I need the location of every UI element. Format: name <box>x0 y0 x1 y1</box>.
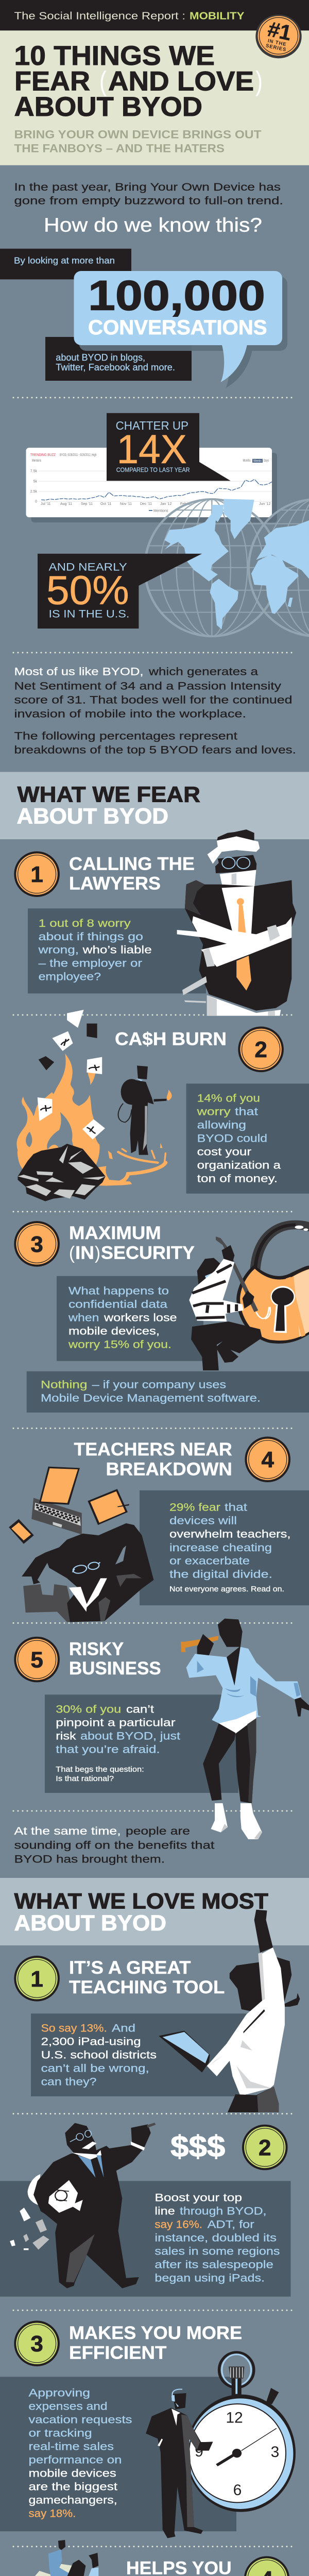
fact box: allowing <box>197 1120 246 1131</box>
fact box: confidential data <box>68 1298 167 1310</box>
heading: $$$ <box>170 2130 225 2163</box>
fact box <box>140 1490 309 1605</box>
love 2: dollars <box>0 2125 290 2297</box>
fact box: 1 out of 8 worry <box>39 918 131 929</box>
fact box: workers lose <box>104 1312 177 1324</box>
chart card: trending buzz: Months <box>243 459 251 463</box>
question heading: How do we know this? <box>44 214 262 236</box>
chart card: trending buzz: Mentions <box>153 509 168 513</box>
intro text: In the past year, Bring Your Own Device has <box>14 181 281 193</box>
fact text: say 16%. <box>154 2219 202 2231</box>
clock numbers <box>195 2410 279 2499</box>
50% in the U.S. callout: 50% <box>46 568 129 613</box>
fact box: mobile devices <box>29 2468 116 2480</box>
fact text: through BYOD, <box>180 2206 266 2217</box>
number coin 4 <box>244 2556 289 2576</box>
icon: jumping woman with ribbon <box>0 2540 114 2576</box>
chatter up callout: COMPARED TO LAST YEAR <box>116 467 190 473</box>
fact box: when <box>68 1312 99 1324</box>
fact box: mobile devices, <box>68 1325 160 1337</box>
transition text <box>14 1825 215 1866</box>
icon: frazzled teacher <box>22 1523 153 1622</box>
fact box: can’t all be wrong, <box>41 2063 149 2075</box>
section heading: what we fear <box>0 772 309 839</box>
chatter up callout <box>107 413 231 481</box>
heading: CA$H BURN <box>115 1029 227 1049</box>
fact box: cost your <box>197 1146 251 1158</box>
icon: stopwatch and man <box>146 2352 296 2538</box>
heading: TEACHING TOOL <box>69 1977 225 1997</box>
icon: flying devices <box>9 1467 129 1544</box>
fact box: are the biggest <box>29 2481 117 2493</box>
label: about BYOD in blogs: about BYOD in blogs, <box>56 352 145 363</box>
burning bills <box>38 1010 105 1140</box>
fact box: 29% fear <box>169 1502 220 1514</box>
number coin 4 <box>245 1436 290 1482</box>
50% in the U.S. callout: AND NEARLY <box>48 561 127 573</box>
chatter up callout: 14X <box>117 427 187 472</box>
clock numbers: 12 <box>226 2410 243 2427</box>
heading <box>69 854 195 894</box>
fact box: say 18%. <box>29 2508 76 2520</box>
transition text: BYOD has brought them. <box>14 1854 165 1866</box>
fear 3: maximum insecurity <box>14 1221 309 1413</box>
sentiment text block: invasion of mobile into the workplace. <box>14 708 246 720</box>
main title: FEAR <box>14 66 90 97</box>
fact box: gamechangers, <box>29 2495 117 2506</box>
badge: #1 in the series: #1 <box>266 17 294 45</box>
fact box: ton of money. <box>197 1173 278 1185</box>
sentiment text block: Net Sentiment of 34 and a Passion Intensity <box>14 680 282 692</box>
fact box: organization a <box>197 1160 281 1172</box>
speech bubble: 100,000 conversations: 100,000 <box>88 273 265 319</box>
solution box <box>27 1371 309 1413</box>
fact box: That begs the question: <box>56 1766 144 1774</box>
section heading: what we fear: ABOUT BYOD <box>16 804 168 828</box>
heading <box>69 2323 242 2363</box>
number coin 4: 4 <box>261 1447 274 1472</box>
number coin 1 <box>14 851 60 897</box>
clock numbers: 3 <box>271 2444 279 2461</box>
heading: IT’S A GREAT <box>69 1958 191 1978</box>
heading: MAKES YOU MORE <box>69 2323 242 2343</box>
number coin 2 <box>242 2125 288 2170</box>
heading: ) <box>95 1243 100 1263</box>
fact box: And <box>112 2022 135 2034</box>
main title: ABOUT BYOD <box>14 92 202 122</box>
fact box: that <box>235 1106 258 1117</box>
fact box: can they? <box>41 2076 97 2088</box>
box <box>0 2181 290 2297</box>
heading <box>69 1958 225 1997</box>
chart card: trending buzz: 0 <box>35 500 37 504</box>
fact box: real-time sales <box>29 2441 114 2453</box>
fact box: can’t <box>126 1703 154 1715</box>
section heading: what we fear: WHAT WE FEAR <box>18 783 200 807</box>
label: about BYOD in blogs: Twitter, Facebook and more. <box>56 362 175 372</box>
fact box <box>45 1694 238 1793</box>
fact box: that <box>225 1502 247 1514</box>
chart card: trending buzz: Dec '11 <box>140 502 152 506</box>
flamethrower man <box>118 1065 166 1155</box>
chart card: trending buzz: Mentions <box>32 459 41 463</box>
fact box: or tracking <box>29 2428 92 2439</box>
badge: #1 in the series: SERIES <box>265 43 287 53</box>
fact box: BYOD could <box>197 1133 267 1145</box>
fact box: worry 15% of you. <box>68 1338 171 1350</box>
title panel <box>0 30 309 165</box>
solution box: Nothing <box>41 1379 88 1391</box>
fear 2: cash burn <box>115 1026 309 1194</box>
fact box: wrong, <box>38 944 79 956</box>
heading <box>69 1223 195 1263</box>
icon: burning money and flamethrower man <box>16 1010 172 1201</box>
number coin 2 <box>238 1026 284 1072</box>
main title: ( <box>99 66 107 97</box>
main title: ) <box>255 66 263 97</box>
fact text: sales in some regions <box>154 2246 280 2258</box>
badge: #1 in the series: IN THE <box>267 38 287 47</box>
label: about BYOD in blogs <box>45 337 192 381</box>
number coin 2: 2 <box>254 1037 267 1062</box>
fact box: increase cheating <box>169 1542 272 1554</box>
heading: RISKY <box>69 1639 124 1659</box>
chart card: trending buzz: 5k <box>33 480 37 483</box>
fact box: overwhelm teachers, <box>169 1529 290 1540</box>
fact box: devices will <box>169 1515 237 1527</box>
icon: teacher with tablet <box>159 1910 300 2112</box>
intro text: gone from empty buzzword to full-on trend. <box>14 195 283 207</box>
fact box: Not everyone agrees. Read on. <box>169 1585 284 1594</box>
fact box: worry <box>196 1106 231 1117</box>
number coin 3 <box>14 1221 60 1267</box>
padlock <box>236 1225 309 1344</box>
fact box: U.S. school districts <box>41 2049 157 2061</box>
heading: MAXIMUM <box>69 1223 161 1243</box>
transition text: At the same time, <box>14 1825 121 1837</box>
fact text: ADT, for <box>208 2219 254 2231</box>
chart card: trending buzz: Sep '11 <box>81 502 93 506</box>
chart card: trending buzz: Jul '11 <box>41 502 51 506</box>
speech bubble: 100,000 conversations: CONVERSATIONS <box>88 316 267 339</box>
number coin 2: 2 <box>259 2135 271 2161</box>
heading: ( <box>69 1243 75 1263</box>
fact box <box>57 1276 203 1361</box>
fact box: risk <box>56 1731 76 1742</box>
chart card: trending buzz: Jan '12 <box>160 502 171 506</box>
header bar <box>0 0 309 30</box>
fact box <box>28 908 206 993</box>
thief <box>189 1236 262 1370</box>
heading: EFFICIENT <box>69 2343 166 2363</box>
sentiment text block: Most of us like BYOD, <box>14 666 143 678</box>
fact box <box>0 2377 236 2531</box>
fear 5: risky business <box>14 1637 238 1793</box>
chart card: trending buzz: BYOD, 6/26/2011 - 6/26/2012, High <box>60 453 97 457</box>
main title <box>14 41 263 122</box>
number coin 3 <box>14 2320 60 2366</box>
chatter up callout: CHATTER UP <box>116 419 188 432</box>
icon: bandaged lawyer <box>177 829 296 1016</box>
fact box: performance on <box>29 2454 122 2466</box>
fact box: about BYOD, just <box>80 1731 180 1742</box>
header bar: The Social Intelligence Report : <box>14 10 185 22</box>
fact box: 14% of you <box>197 1092 260 1104</box>
fact box: employee? <box>39 971 101 983</box>
fact box: 2,300 iPad-using <box>41 2036 141 2047</box>
chart card: trending buzz: Aug '11 <box>60 502 72 506</box>
speech bubble: 100,000 conversations <box>74 271 287 388</box>
fear 1: calling the lawyers <box>14 851 206 993</box>
heading: CALLING THE <box>69 854 195 874</box>
fear 4: teachers near breakdown <box>74 1436 309 1605</box>
book pile <box>18 1144 106 1201</box>
sentiment text block: breakdowns of the top 5 BYOD fears and loves. <box>14 744 296 756</box>
badge: #1 in the series <box>255 14 302 58</box>
main title: AND LOVE <box>108 66 254 97</box>
chart card: trending buzz: Feb '12 <box>180 502 192 506</box>
fact box: 30% of you <box>56 1703 121 1715</box>
fact box: or exacerbate <box>169 1555 250 1567</box>
heading: BREAKDOWN <box>106 1459 232 1479</box>
chart card: trending buzz: 7.5k <box>30 470 37 473</box>
fact box: about if things go <box>39 931 143 943</box>
chart card: trending buzz: Jun '12 <box>259 502 270 506</box>
heading: BUSINESS <box>69 1658 161 1679</box>
label: by looking at more than <box>0 249 131 279</box>
section heading: what we love: WHAT WE LOVE MOST <box>14 1889 268 1913</box>
clock numbers: 9 <box>195 2443 203 2460</box>
love 3: makes you more efficient <box>0 2320 242 2531</box>
number coin 5: 5 <box>30 1648 43 1672</box>
section heading: what we love: ABOUT BYOD <box>14 1911 166 1936</box>
world map globes <box>138 498 309 637</box>
icon: businessman with money bag <box>10 2123 156 2289</box>
50% in the U.S. callout <box>38 554 202 629</box>
fact text: instance, doubled its <box>154 2232 277 2244</box>
intro text <box>14 181 283 207</box>
love 1: great teaching tool <box>14 1956 247 2096</box>
label: by looking at more than: By looking at more than <box>14 256 115 266</box>
main title: 10 THINGS WE <box>14 41 215 71</box>
number coin 3: 3 <box>30 1232 43 1257</box>
fact text: Boost your top <box>154 2192 242 2204</box>
heading: SECURITY <box>101 1243 195 1263</box>
fact box: pinpoint a particular <box>56 1717 176 1729</box>
heading <box>69 1639 161 1679</box>
fact box <box>31 2013 247 2096</box>
heading: TEACHERS NEAR <box>74 1439 232 1460</box>
chart card: trending buzz: Nov '11 <box>120 502 132 506</box>
fact text: after its salespeople <box>154 2259 273 2271</box>
fact box: – the employer or <box>39 958 142 970</box>
fact text: line <box>154 2206 175 2217</box>
love 4: helps you run better <box>85 2556 309 2576</box>
sentiment text block: score of 31. That bodes well for the continued <box>14 694 293 706</box>
fact box: that you’re afraid. <box>56 1744 160 1756</box>
heading: IN <box>75 1243 94 1263</box>
flames <box>16 1054 172 1185</box>
heading <box>74 1439 232 1479</box>
subtitle <box>14 128 262 155</box>
transition text: people are <box>126 1825 190 1837</box>
number coin 1 <box>14 1956 60 2002</box>
fact box: What happens to <box>68 1285 169 1297</box>
transition text: sounding off on the benefits that <box>14 1839 215 1851</box>
number coin 1: 1 <box>30 1967 43 1992</box>
fact box: the digital divide. <box>169 1568 272 1580</box>
sentiment text block: which generates a <box>148 666 258 678</box>
chart card: trending buzz: Weeks <box>253 459 262 463</box>
fact box <box>186 1083 309 1194</box>
line chart <box>41 479 272 500</box>
fact box: Is that rational? <box>56 1775 114 1783</box>
chart card: trending buzz: 2.5k <box>30 490 37 494</box>
chart card: trending buzz: Days <box>264 459 269 463</box>
sentiment text block: The following percentages represent <box>14 731 237 742</box>
number coin 1: 1 <box>30 862 43 887</box>
fact text: began using iPads. <box>154 2273 265 2284</box>
fact box: vacation requests <box>29 2414 132 2426</box>
solution box: Mobile Device Management software. <box>41 1393 261 1404</box>
section heading: what we love <box>0 1878 309 1945</box>
fact box: expenses and <box>29 2401 108 2413</box>
subtitle: BRING YOUR OWN DEVICE BRINGS OUT <box>14 128 262 141</box>
number coin 5 <box>14 1637 60 1682</box>
fact box: So say 13%. <box>41 2022 107 2034</box>
icon: thief and padlock <box>189 1225 309 1370</box>
solution box: – if your company uses <box>92 1379 226 1391</box>
chart card: trending buzz <box>26 448 277 522</box>
icon: risky business dancer <box>181 1619 309 1839</box>
fact box: Approving <box>29 2387 90 2399</box>
heading: LAWYERS <box>69 874 161 894</box>
number coin 3: 3 <box>30 2331 43 2357</box>
chart card: trending buzz: Oct '11 <box>100 502 112 506</box>
clock numbers: 6 <box>233 2482 242 2499</box>
50% in the U.S. callout: IS IN THE U.S. <box>48 607 129 620</box>
chart card: trending buzz: May '12 <box>238 502 251 506</box>
chart card: trending buzz: TRENDING BUZZ <box>30 452 56 457</box>
fact text <box>154 2192 280 2284</box>
subtitle: THE FANBOYS – AND THE HATERS <box>14 142 225 155</box>
sentiment text block <box>14 666 296 756</box>
header bar: MOBILITY <box>190 10 245 22</box>
fact box: who’s liable <box>82 944 152 956</box>
